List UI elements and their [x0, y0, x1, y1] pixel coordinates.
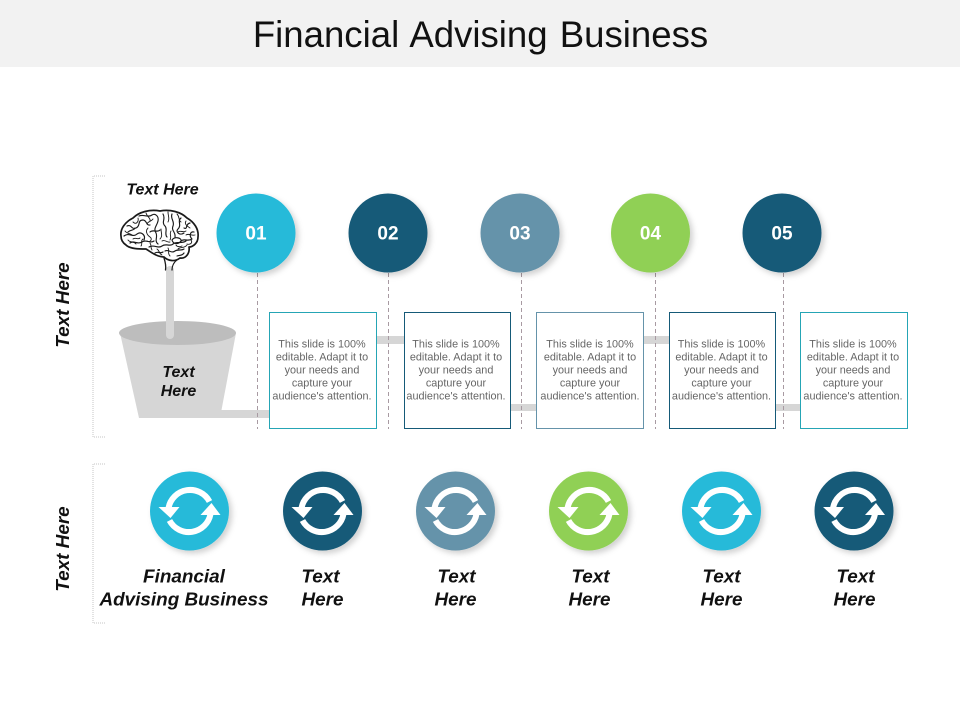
text box 4: your needs and [684, 364, 759, 376]
text box 4: audience's attention. [672, 390, 771, 402]
text box 5: capture your [823, 378, 884, 390]
caption 2: Here [301, 590, 344, 610]
side label: top section: Text Here [53, 262, 74, 348]
step 05: 05 [771, 224, 793, 244]
caption 3: Text [437, 566, 476, 588]
caption 1: Advising Business [98, 590, 269, 610]
step 01 [216, 194, 296, 272]
connector: box 4 to box 5 [776, 404, 800, 411]
text box 1: capture your [292, 378, 353, 390]
text box 5: editable. Adapt it to [807, 352, 899, 364]
pot label: Here [161, 383, 196, 400]
text box 3: your needs and [553, 364, 627, 376]
text box 3 [536, 312, 644, 428]
title band [0, 0, 960, 67]
text box 1: your needs and [285, 364, 359, 376]
caption 4: Here [568, 590, 611, 610]
text box 1: editable. Adapt it to [276, 352, 368, 364]
dashed leader 5 [782, 273, 784, 429]
step 04: 04 [640, 224, 661, 244]
text box 2: capture your [426, 378, 487, 390]
icon: refresh 6 [814, 472, 894, 550]
dashed leader 1 [256, 273, 258, 429]
caption 5: Text [702, 566, 741, 588]
text box 2: editable. Adapt it to [410, 352, 502, 364]
text box 5: This slide is 100% [809, 338, 897, 350]
caption 2: Text [301, 566, 340, 588]
connector: box 2 to box 3 [511, 404, 536, 411]
text box 5: your needs and [816, 364, 890, 376]
connector: box 1 to box 2 [377, 336, 404, 344]
step 02 [348, 194, 428, 272]
text box 2: audience's attention. [406, 390, 506, 402]
side label: bottom section: Text Here [53, 506, 74, 592]
text box 5 [800, 312, 908, 428]
icon: brain [121, 210, 198, 270]
caption 5: Here [700, 590, 743, 610]
pot label: Text [162, 364, 195, 381]
text box 4: capture your [691, 378, 752, 390]
text box 4: This slide is 100% [678, 338, 766, 350]
text box 3: This slide is 100% [546, 338, 634, 350]
step 05 [742, 194, 822, 272]
dashed leader 2 [388, 273, 390, 429]
caption 3: Here [434, 590, 477, 610]
bracket: top section [93, 176, 105, 437]
step 04 [611, 194, 690, 272]
title: Financial Advising Business [253, 14, 708, 55]
icon: refresh 3 [416, 472, 495, 550]
bracket: bottom section [93, 464, 105, 623]
caption 6: Text [836, 566, 875, 588]
text box 3: audience's attention. [540, 390, 640, 402]
icon: refresh 5 [682, 472, 761, 550]
text box 2: This slide is 100% [412, 338, 500, 350]
icon: potted plant with brain [119, 210, 236, 418]
step 02: 02 [377, 224, 399, 244]
text box 1: audience's attention. [272, 390, 372, 402]
text box 5: audience's attention. [803, 390, 903, 402]
icon: refresh 1 [150, 472, 229, 550]
connector: pot to box 1 [218, 410, 270, 418]
text box 1: This slide is 100% [278, 338, 366, 350]
text box 4: editable. Adapt it to [675, 352, 768, 364]
step 03: 03 [509, 224, 531, 244]
text box 2: your needs and [419, 364, 493, 376]
connector: box 3 to box 4 [644, 336, 669, 344]
step 03 [480, 194, 560, 272]
brain label: Text Here [126, 182, 199, 198]
dashed leader 3 [520, 273, 522, 429]
text box 1 [270, 312, 376, 428]
text box 3: capture your [560, 378, 621, 390]
step 01: 01 [245, 224, 267, 244]
caption 1: Financial [143, 566, 226, 588]
dashed leader 4 [654, 273, 656, 429]
icon: refresh 2 [283, 472, 362, 550]
caption 4: Text [571, 566, 610, 588]
text box 3: editable. Adapt it to [544, 352, 636, 364]
text box 2 [404, 312, 510, 428]
text box 4 [670, 312, 776, 428]
caption 6: Here [833, 590, 876, 610]
icon: refresh 4 [549, 472, 628, 550]
